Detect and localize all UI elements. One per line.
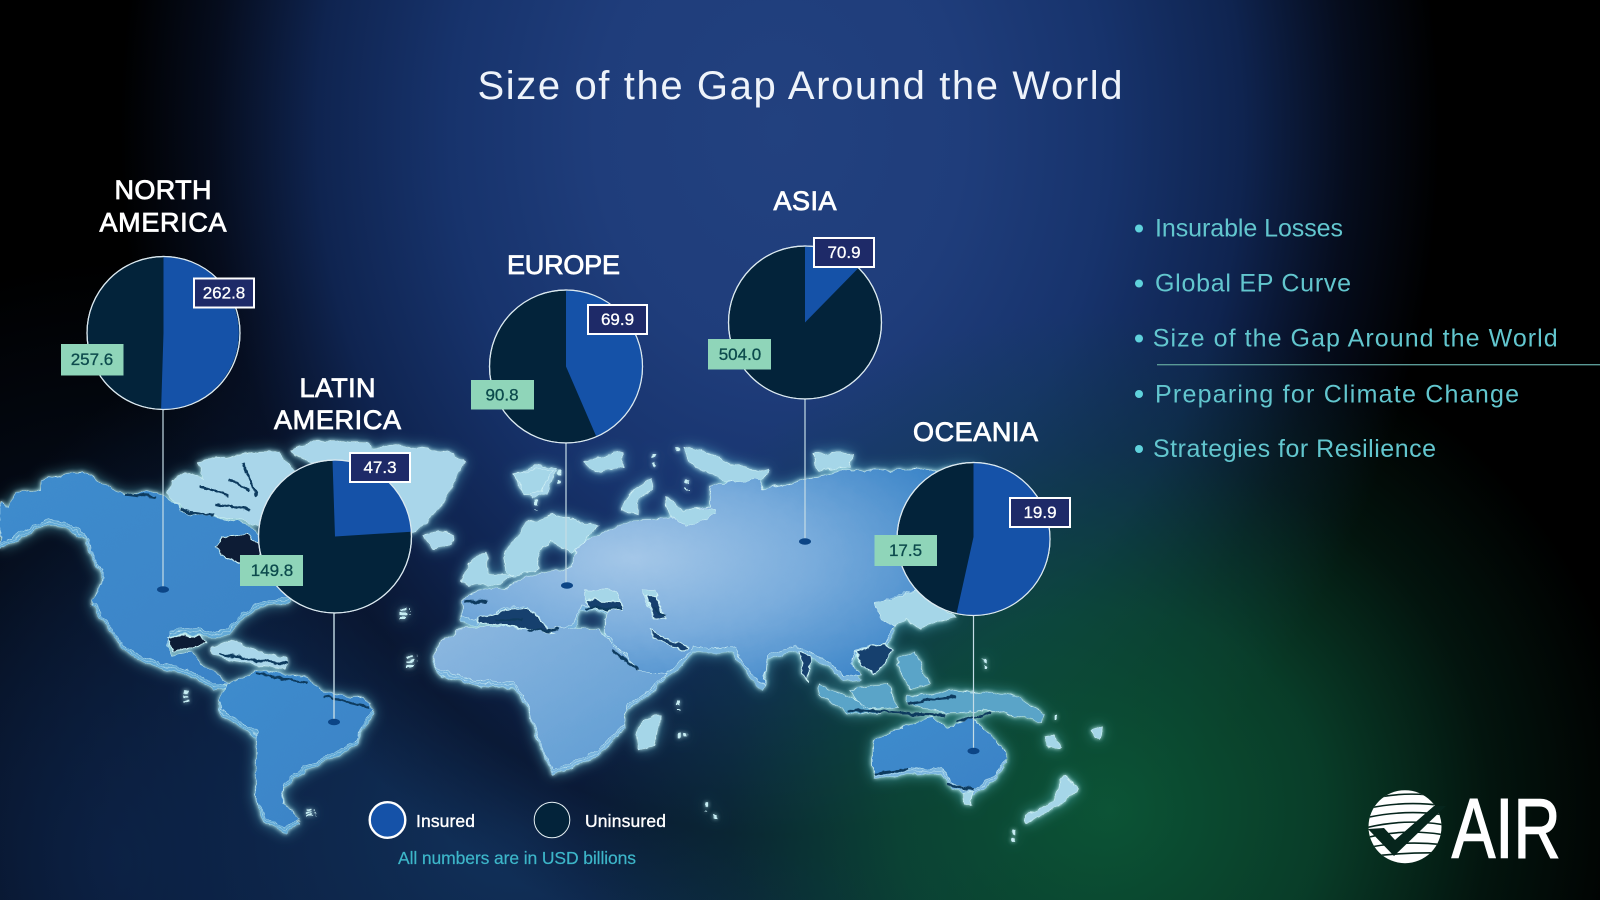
- value: uninsured 257.6: [61, 344, 124, 376]
- map: western hemisphere: [0, 442, 557, 834]
- nav item: Size of the Gap Around the World (active): Size of the Gap Around the World: [1153, 325, 1558, 353]
- region: Oceania: [874, 417, 1070, 754]
- label: Latin America: [274, 373, 401, 435]
- legend note: All numbers are in USD billions: [398, 848, 636, 868]
- value: insured 70.9: 70.9: [827, 243, 861, 262]
- nav item: Global EP Curve: Global EP Curve: [1155, 270, 1351, 298]
- world map: [0, 442, 1103, 843]
- pie: Oceania: [897, 462, 1050, 616]
- pie: Latin America: [258, 460, 412, 613]
- nav item: Strategies for Resilience: Strategies for Resilience: [1153, 435, 1436, 463]
- value: insured 69.9: [588, 305, 647, 334]
- value: uninsured 257.6: 257.6: [71, 350, 113, 369]
- value: uninsured 504.0: [708, 339, 771, 370]
- sidebar navigation: [1135, 215, 1600, 463]
- stem and marker: North America: [157, 409, 169, 593]
- region: Asia: [708, 186, 882, 545]
- stem and marker: Latin America: [328, 613, 340, 725]
- value: uninsured 17.5: 17.5: [889, 541, 922, 560]
- stem and marker: Asia: [799, 399, 811, 545]
- region: Latin America: [240, 373, 412, 725]
- value: insured 262.8: [194, 278, 254, 308]
- stem and marker: Oceania: [968, 615, 980, 754]
- wordmark: AIR: [1452, 781, 1561, 875]
- value: insured 70.9: [814, 238, 874, 267]
- label: Latin America: AMERICA: [274, 405, 401, 435]
- value: uninsured 504.0: 504.0: [719, 345, 761, 364]
- value: uninsured 149.8: [240, 555, 303, 586]
- legend: [370, 802, 666, 868]
- value: uninsured 17.5: [874, 535, 937, 566]
- value: insured 47.3: 47.3: [363, 458, 397, 477]
- nav item: Preparing for Climate Change: Preparing for Climate Change: [1155, 380, 1519, 408]
- label: North America: AMERICA: [100, 208, 226, 238]
- stem and marker: Europe: [561, 443, 573, 589]
- value: insured 19.9: [1010, 498, 1070, 527]
- value: uninsured 90.8: 90.8: [485, 386, 519, 404]
- value: insured 19.9: 19.9: [1023, 503, 1057, 522]
- nav item: Insurable Losses: Insurable Losses: [1155, 215, 1343, 243]
- pie: North America: [87, 256, 240, 410]
- legend item: insured: Insured: [416, 811, 475, 831]
- label: Europe: EUROPE: [507, 250, 620, 280]
- value: uninsured 149.8: 149.8: [251, 561, 293, 580]
- icon: striped globe with check mark: [1365, 790, 1446, 863]
- pie: Asia: [728, 246, 882, 399]
- label: Latin America: LATIN: [300, 373, 376, 403]
- legend item: insured: [370, 802, 475, 838]
- region: North America: [61, 175, 254, 593]
- map: eastern hemisphere: [433, 447, 1103, 843]
- title: Size of the Gap Around the World: [478, 64, 1122, 108]
- legend item: uninsured: Uninsured: [585, 811, 666, 831]
- nav item: Size of the Gap Around the World (active): [1135, 325, 1600, 365]
- value: insured 262.8: 262.8: [203, 284, 245, 302]
- logo: AIR: [1368, 790, 1559, 864]
- value: uninsured 90.8: [471, 380, 534, 410]
- label: Asia: ASIA: [774, 186, 836, 216]
- label: North America: [100, 175, 226, 238]
- pie: Europe: [490, 290, 642, 443]
- value: insured 47.3: [350, 453, 410, 482]
- label: Oceania: OCEANIA: [913, 417, 1038, 447]
- label: North America: NORTH: [114, 175, 212, 205]
- region: Europe: [471, 250, 647, 589]
- legend item: uninsured: [534, 802, 666, 838]
- value: insured 69.9: 69.9: [601, 310, 634, 329]
